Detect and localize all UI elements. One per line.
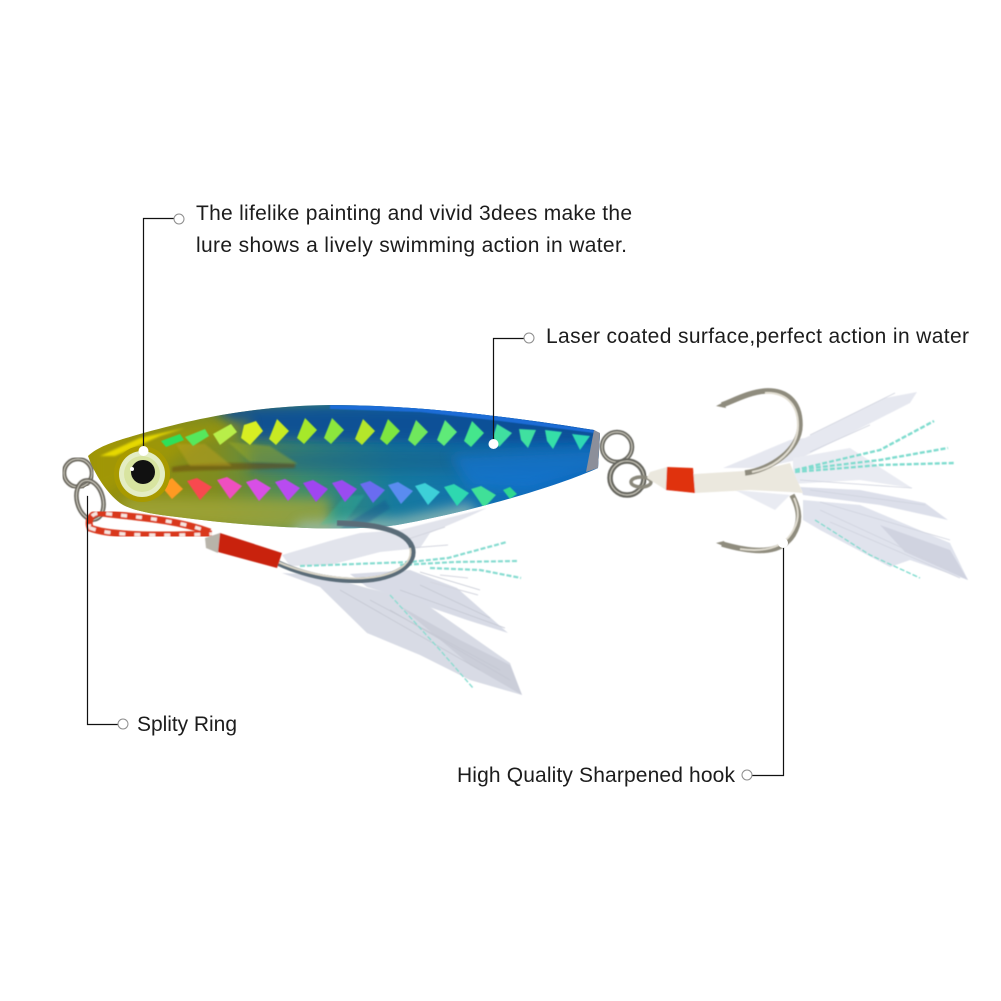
callout: split ring: Splity Ring	[137, 713, 237, 736]
braided assist cord	[89, 513, 212, 535]
eye	[114, 446, 170, 502]
lower diamond row	[161, 477, 517, 508]
nose split ring	[64, 459, 92, 487]
rear assist hook feathers	[282, 508, 522, 695]
callout: split ring	[83, 486, 237, 736]
rear tinsel strands	[795, 421, 954, 578]
callout: laser coated surface	[488, 325, 969, 449]
callout: lifelike painting	[138, 202, 632, 456]
callout: lifelike painting: The lifelike painting and vivid 3dees make the	[196, 202, 632, 225]
upper diamond row	[161, 418, 590, 450]
callout: lifelike painting: lure shows a lively swimming action in water.	[196, 234, 627, 257]
front tinsel strands	[300, 542, 521, 688]
treble hook	[631, 391, 803, 550]
rear split rings	[602, 432, 644, 495]
red sleeve	[205, 533, 282, 568]
lure body	[88, 405, 600, 528]
callout: sharpened hook: High Quality Sharpened hook	[457, 764, 736, 787]
callout: laser coated surface: Laser coated surface,perfect action in water	[546, 325, 969, 348]
rear treble tail feathers	[723, 392, 968, 580]
callout: sharpened hook	[457, 538, 788, 787]
second split ring	[72, 477, 108, 523]
assist hook	[278, 523, 413, 580]
